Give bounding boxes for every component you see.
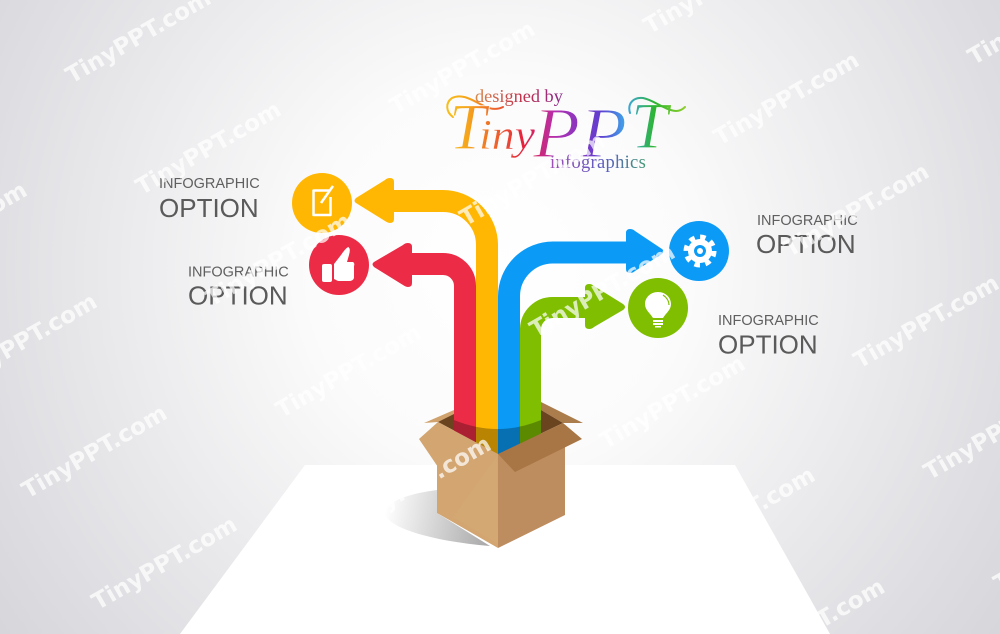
logo xyxy=(447,86,685,173)
arrow: yellow xyxy=(354,178,487,460)
watermarks: T.com xyxy=(812,574,889,634)
text: option mid left: OPTION xyxy=(188,280,288,310)
white floor xyxy=(180,465,830,634)
watermarks: TinyPPT.com xyxy=(202,208,356,312)
right front flap xyxy=(498,423,582,472)
arrow stem shadow inside box xyxy=(454,420,541,460)
right box panel xyxy=(498,447,565,548)
watermarks: TinyPPT.com xyxy=(780,159,934,263)
arrow: blue xyxy=(509,229,664,460)
icon: notepad and pen xyxy=(292,173,352,233)
watermarks: TinyPPT.com xyxy=(18,400,172,504)
text: option top right: INFOGRAPHIC xyxy=(757,213,858,229)
text: option top right: OPTION xyxy=(756,229,856,259)
logo: T xyxy=(449,91,490,164)
text: option lower right: OPTION xyxy=(718,330,818,360)
box back and interior xyxy=(424,402,583,454)
text: option mid left: INFOGRAPHIC xyxy=(188,264,289,280)
logo: PP xyxy=(532,93,627,173)
left box panel xyxy=(437,447,498,548)
text: option top left: OPTION xyxy=(159,193,259,223)
icon: light bulb xyxy=(628,278,688,338)
watermarks: TinyPPT.com xyxy=(666,462,820,566)
logo: designed by xyxy=(475,86,564,106)
watermarks: TinyPPT.com xyxy=(342,431,496,535)
text: option top right xyxy=(756,213,858,259)
logo: infographics xyxy=(550,153,646,173)
watermarks: TinyPPT.com xyxy=(850,270,1000,374)
left panel facet xyxy=(453,456,498,544)
box shadow xyxy=(385,490,490,546)
arrow: green xyxy=(530,284,625,460)
text: option lower right xyxy=(718,313,819,360)
text: option top left: INFOGRAPHIC xyxy=(159,176,260,192)
arrow: red xyxy=(372,243,465,460)
logo: iny xyxy=(479,113,535,159)
watermarks: TinyPPT.com xyxy=(88,512,242,616)
left front flap xyxy=(419,422,498,470)
watermarks: TinyPPT.com xyxy=(272,320,426,424)
watermarks: TinyPPT.com xyxy=(526,239,680,343)
icon: gear xyxy=(669,221,729,281)
text: option top left xyxy=(159,176,260,223)
text: option lower right: INFOGRAPHIC xyxy=(718,313,819,329)
watermarks: TinyPPT.com xyxy=(596,351,750,455)
logo: T xyxy=(631,90,672,163)
watermarks: TinyPPT.com xyxy=(710,47,864,151)
text: option mid left xyxy=(188,264,289,310)
watermarks: TinyPPT.com xyxy=(386,16,540,120)
box front xyxy=(419,422,582,548)
watermarks: TinyPPT.com xyxy=(456,128,610,232)
icon: thumbs up xyxy=(309,235,369,295)
watermarks: TinyPPT.com xyxy=(132,97,286,201)
